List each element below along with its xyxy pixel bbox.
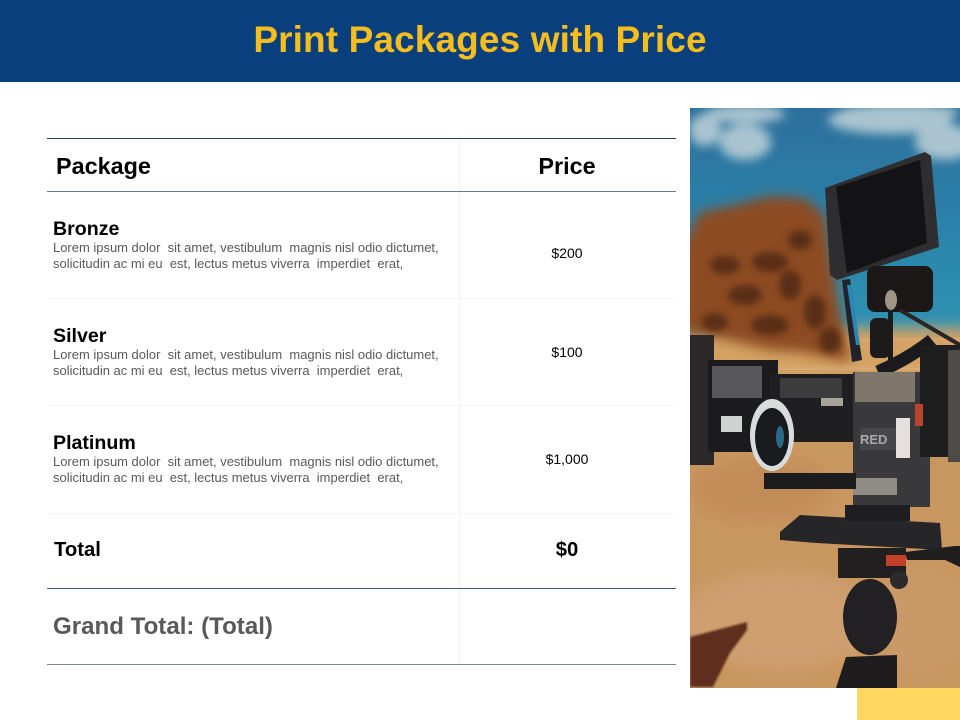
ground (690, 370, 960, 688)
row: bronze: Lorem ipsum dolor sit amet, vestibulum magnis nisl odio dictumet, solicitudin ac mi eu est, lectus metus viverra imperdiet erat, (53, 240, 439, 271)
distant tree (680, 196, 850, 362)
row: platinum: Platinum (53, 432, 136, 454)
monitor arm and rigging (842, 266, 960, 373)
row: total (54, 539, 578, 561)
row: total: $0 (556, 539, 578, 561)
lens (690, 335, 853, 465)
row: grand total: Grand Total: (Total) (53, 613, 273, 640)
row: silver (53, 325, 583, 378)
clouds (689, 104, 960, 160)
row: platinum (53, 432, 588, 485)
row: silver: Lorem ipsum dolor sit amet, vestibulum magnis nisl odio dictumet, solicitudin ac mi eu est, lectus metus viverra imperdiet erat, (53, 347, 439, 378)
camera body (853, 345, 960, 507)
camera body: RED (860, 432, 887, 447)
photo: cinema camera in a field (690, 108, 960, 688)
header row (56, 153, 596, 179)
column heading: price: Price (538, 153, 596, 179)
title: Print Packages with Price (253, 19, 707, 60)
tripod head (836, 548, 908, 688)
row: bronze: Bronze (53, 218, 119, 240)
row: total: Total (54, 539, 101, 561)
row: bronze: $200 (551, 245, 583, 261)
sky (690, 108, 960, 338)
yellow accent block (857, 688, 960, 720)
row: platinum: $1,000 (546, 451, 588, 467)
focus ring (750, 399, 794, 471)
shadow on ground (690, 622, 747, 687)
row: bronze (53, 218, 583, 271)
header band (0, 0, 960, 82)
column heading: package: Package (56, 153, 151, 179)
base plate (764, 473, 960, 567)
pricing table (47, 138, 676, 665)
row: silver: $100 (551, 344, 583, 360)
monitor (825, 152, 939, 280)
row: silver: Silver (53, 325, 106, 347)
row: platinum: Lorem ipsum dolor sit amet, vestibulum magnis nisl odio dictumet, solicitudin ac mi eu est, lectus metus viverra imperdiet erat, (53, 454, 439, 485)
